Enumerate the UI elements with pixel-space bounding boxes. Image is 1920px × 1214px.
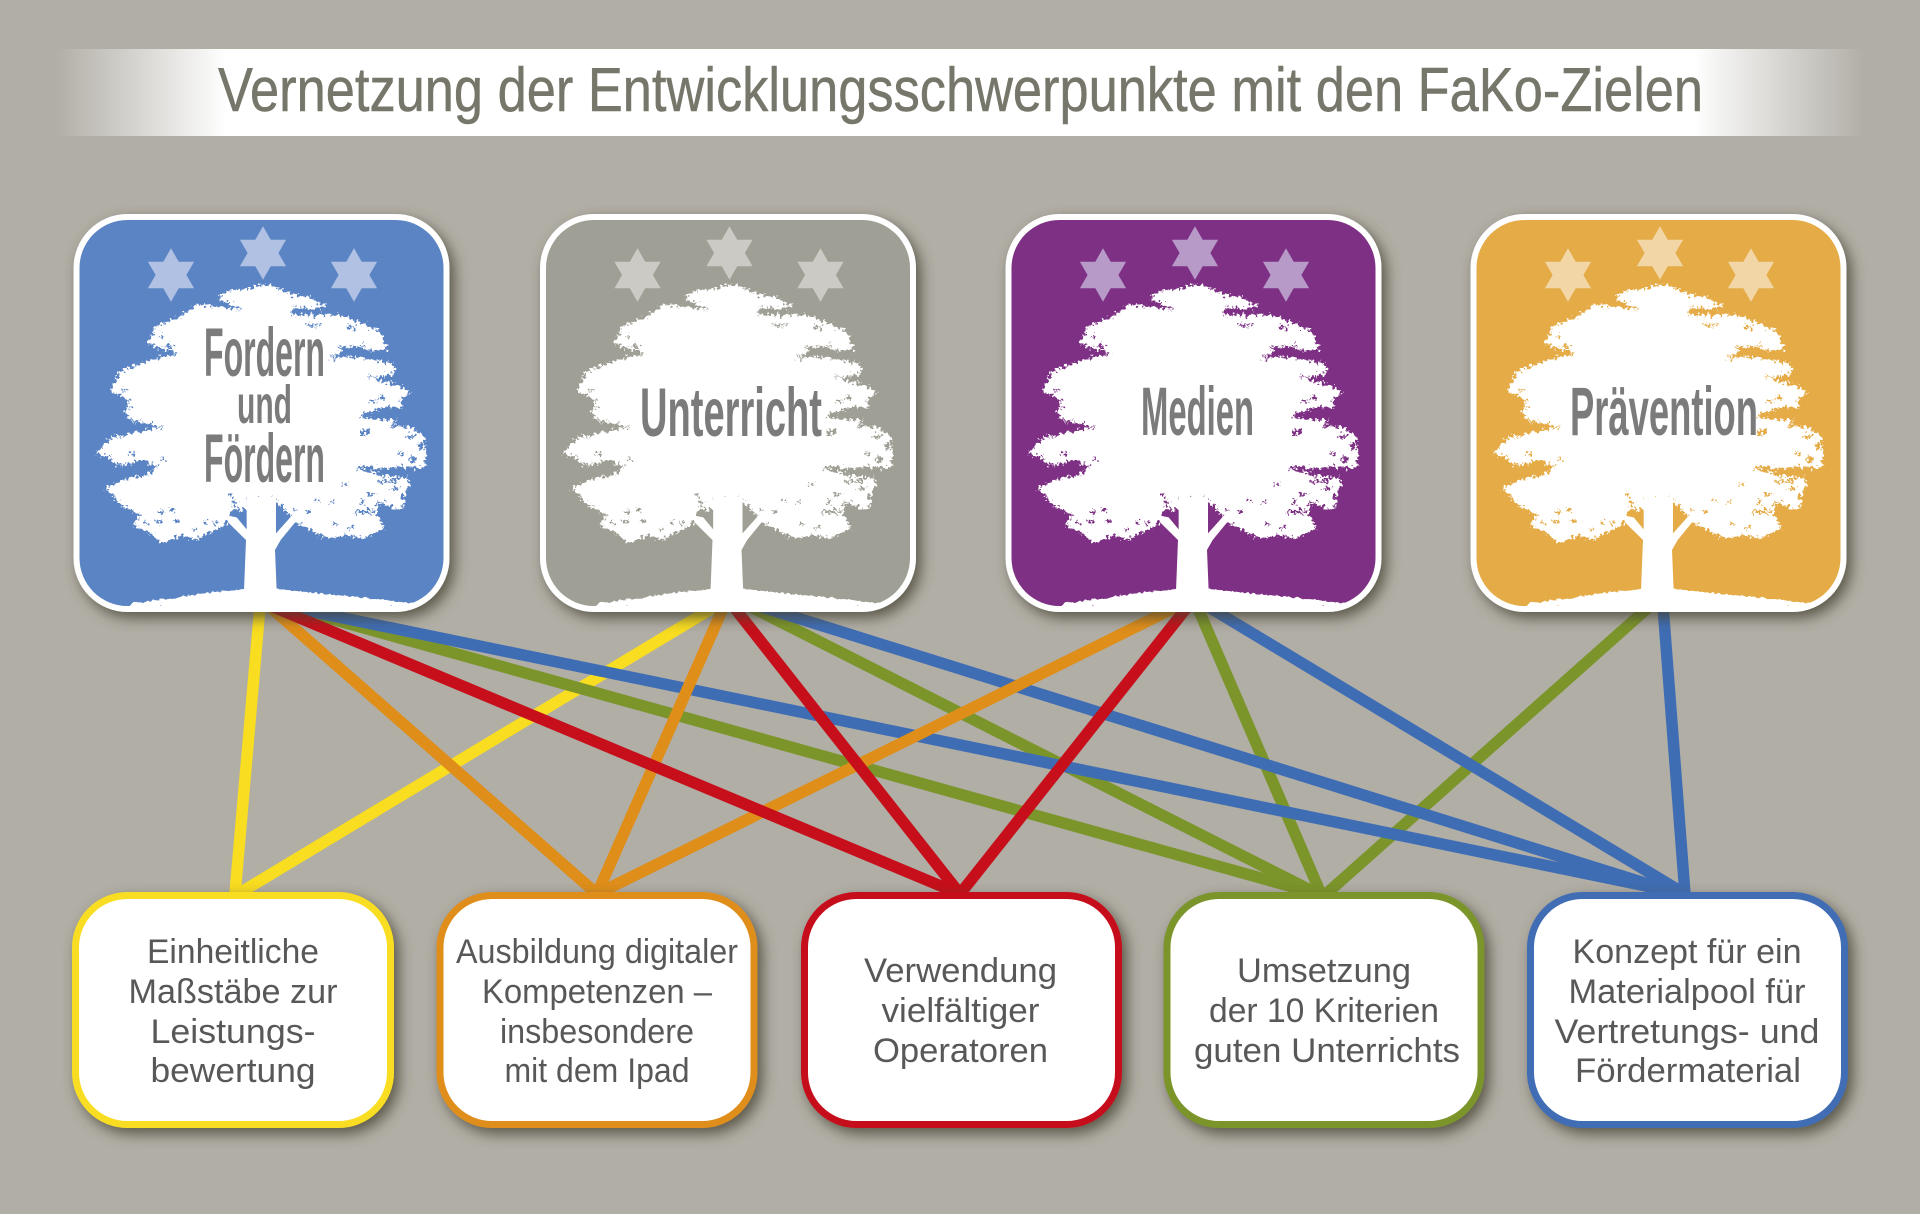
goal text 3: Operatoren — [873, 1032, 1048, 1070]
goal text 2: mit dem Ipad — [504, 1052, 690, 1090]
icon: stars — [148, 226, 377, 302]
goal text 3 — [864, 952, 1057, 1070]
goal box 1: yellow — [76, 896, 390, 1124]
goal text 1 — [128, 933, 338, 1090]
goal box 4: green — [1167, 896, 1481, 1124]
goal box 5: blue — [1530, 896, 1844, 1124]
panel: Unterricht — [540, 214, 916, 612]
panel: Fordern und Fördern: Fordern — [204, 314, 325, 391]
icon: tree — [562, 284, 893, 607]
goal text 2: Kompetenzen – — [482, 973, 712, 1011]
goal text 5: Vertretungs- und — [1554, 1013, 1820, 1051]
panel: Fordern und Fördern: Fördern — [204, 420, 325, 497]
goal box 2: orange — [440, 896, 754, 1124]
green lines to goal 4 — [285, 606, 1650, 894]
icon: stars — [1545, 226, 1774, 302]
goal text 2 — [456, 933, 738, 1090]
icon: tree — [96, 284, 427, 607]
goal text 5: Konzept für ein — [1572, 933, 1802, 971]
panel: Medien: Medien — [1141, 373, 1254, 450]
panel: Medien — [1006, 214, 1382, 612]
orange lines to goal 2 — [269, 606, 1178, 894]
goal text 1: Leistungs- — [150, 1013, 316, 1051]
heading: Fordern und Fördern — [204, 314, 325, 497]
goal text 4 — [1194, 952, 1460, 1070]
icon: stars — [614, 226, 844, 302]
panel: Prävention — [1470, 214, 1846, 612]
yellow lines to goal 1 — [235, 606, 716, 894]
goal text 5: Materialpool für — [1568, 973, 1806, 1011]
goal text 5: Fördermaterial — [1575, 1052, 1801, 1090]
panel: Fordern und Fördern — [74, 214, 450, 612]
goal text 1: Maßstäbe zur — [128, 973, 338, 1011]
connection lines — [235, 606, 1685, 894]
goal text 2: insbesondere — [500, 1013, 694, 1051]
goal text 4: guten Unterrichts — [1194, 1032, 1460, 1070]
heading: Prävention: Prävention — [1570, 373, 1758, 450]
goal text 1: bewertung — [150, 1052, 316, 1090]
icon: tree — [1028, 284, 1359, 607]
heading: Fordern und Fördern: und — [237, 375, 292, 435]
goal text 4: der 10 Kriterien — [1209, 992, 1439, 1030]
goal box 3: red — [804, 896, 1118, 1124]
icon: stars — [1080, 226, 1309, 302]
goal text 1: Einheitliche — [147, 933, 319, 971]
red lines to goal 3 — [271, 606, 1188, 894]
goal text 4: Umsetzung — [1237, 952, 1411, 990]
blue lines to goal 5 — [285, 606, 1685, 894]
goal text 5 — [1554, 933, 1820, 1090]
icon: tree — [1493, 284, 1824, 607]
heading: Unterricht: Unterricht — [640, 374, 822, 451]
goal text 3: vielfältiger — [882, 992, 1040, 1030]
goal text 2: Ausbildung digitaler — [456, 933, 738, 971]
title band — [55, 49, 1865, 136]
goal text 3: Verwendung — [864, 952, 1057, 990]
